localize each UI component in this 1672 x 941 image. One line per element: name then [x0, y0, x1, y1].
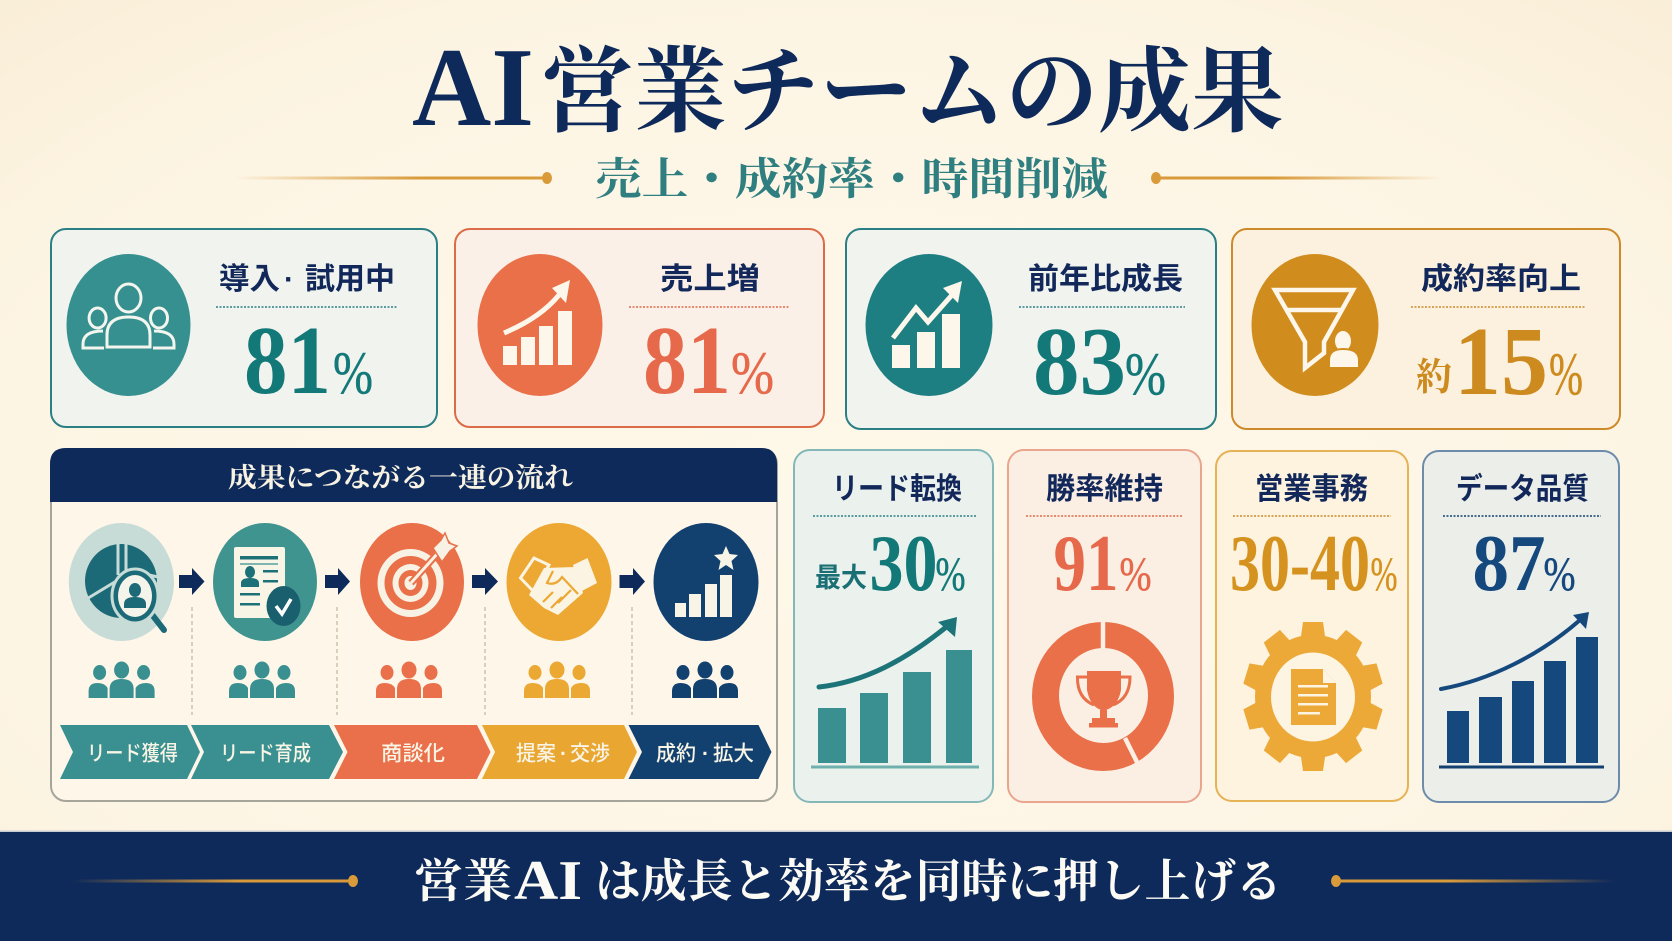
panel: 勝率維持: 勝率維持	[1046, 473, 1163, 506]
panel: 成約率向上 約15%: 約	[1416, 357, 1452, 399]
icon: rising bars	[478, 254, 602, 396]
panel: 勝率維持: 91	[1054, 520, 1118, 608]
panel: 成約率向上 約15%	[1232, 229, 1620, 429]
icon: gear with document	[1242, 622, 1384, 771]
panel: リード転換: 30	[870, 520, 938, 608]
chevron: 成約・拡大: ·	[702, 742, 709, 766]
panel: リード転換: リード転換	[832, 473, 962, 506]
title: AI	[412, 26, 534, 150]
label: ·	[284, 263, 294, 296]
panel: 勝率維持: %	[1120, 548, 1152, 601]
chevron: リード獲得: リード獲得	[87, 742, 178, 766]
chevron: リード獲得	[60, 725, 200, 779]
panel: 成約率向上 約15%: 成約率向上	[1421, 263, 1581, 296]
flow header bar: 成果につながる一連の流れ	[228, 463, 573, 493]
arrow	[325, 568, 350, 595]
subtitle with ornaments: 売上・成約率・時間削減	[595, 155, 1108, 204]
team icons	[89, 662, 738, 698]
panel: データ品質: 87	[1472, 520, 1546, 608]
panel: 営業事務: 30-40	[1230, 520, 1370, 608]
chevron: リード育成: リード育成	[220, 742, 311, 766]
panel: 導入・試用中 81%	[51, 229, 437, 427]
panel: 売上増 81%: 81	[643, 307, 731, 415]
panel: データ品質	[1423, 451, 1619, 802]
icon: funnel with person	[1252, 254, 1378, 396]
arrow	[472, 568, 498, 595]
icon: growth chart	[866, 254, 992, 396]
subtitle with ornaments	[232, 155, 1444, 204]
arrow	[620, 568, 645, 595]
panel: 導入・試用中 81%: 81	[244, 307, 331, 415]
footer banner: 営業	[414, 856, 512, 907]
panel: 勝率維持	[1008, 450, 1201, 802]
label: 試用中	[305, 263, 395, 296]
title: 営業チームの成果	[541, 42, 1284, 145]
donut chart with trophy	[1032, 619, 1174, 771]
chevron: 商談化	[334, 725, 490, 779]
panel: 売上増 81%: 売上増	[660, 263, 760, 296]
icon: lead profile	[213, 523, 317, 641]
bar chart with arrow	[811, 617, 979, 768]
label	[219, 263, 395, 296]
arrow	[179, 568, 204, 595]
bar chart with arrow	[1439, 612, 1604, 768]
panel: 前年比成長 83%: 前年比成長	[1028, 263, 1183, 296]
icon: people	[66, 254, 190, 396]
panel: 営業事務: 営業事務	[1255, 473, 1368, 506]
icon: trophy	[1077, 671, 1130, 728]
icon: handshake	[506, 523, 612, 641]
flow header bar	[50, 448, 777, 502]
panel: 前年比成長 83%: %	[1125, 341, 1166, 407]
panel: データ品質: %	[1544, 548, 1576, 601]
chevron: 成約・拡大	[628, 725, 772, 779]
chevron: 成約・拡大: 拡大	[713, 742, 754, 766]
panel: 成約率向上 約15%: %	[1549, 341, 1583, 407]
chevron: 商談化: 商談化	[381, 742, 445, 766]
panel: 営業事務	[1216, 451, 1408, 801]
panel: リード転換	[794, 450, 993, 802]
label: 導入	[219, 263, 280, 296]
panel: 前年比成長 83%: 83	[1033, 308, 1126, 416]
footer banner: は成長と効率を同時に押し上げる	[595, 856, 1282, 907]
panel: データ品質: データ品質	[1456, 472, 1589, 506]
chevron: 提案・交渉: 交渉	[570, 742, 610, 766]
panel: 成約率向上 約15%: 15	[1454, 308, 1548, 416]
icon: lead search	[69, 523, 174, 641]
panel: 売上増 81%	[455, 229, 824, 427]
footer banner: AI	[514, 850, 582, 912]
panel: 導入・試用中 81%: %	[333, 340, 373, 406]
panel: リード転換: 最大	[815, 563, 867, 593]
chevron: 提案・交渉: 提案	[516, 742, 556, 766]
chevron: 提案・交渉: ·	[560, 742, 567, 766]
panel: process flow	[50, 448, 777, 801]
icon: expansion	[654, 523, 758, 641]
footer banner	[0, 830, 1672, 941]
connector dashes	[192, 607, 632, 715]
chevron: リード育成	[191, 725, 343, 779]
panel: リード転換: %	[936, 548, 966, 601]
panel: 前年比成長 83%	[846, 229, 1216, 429]
chevron: 成約・拡大: 成約	[656, 742, 696, 766]
panel: 売上増 81%: %	[731, 340, 774, 406]
chevron: 提案・交渉	[482, 725, 637, 779]
icon: target	[360, 523, 464, 641]
panel: 営業事務: %	[1370, 548, 1398, 601]
